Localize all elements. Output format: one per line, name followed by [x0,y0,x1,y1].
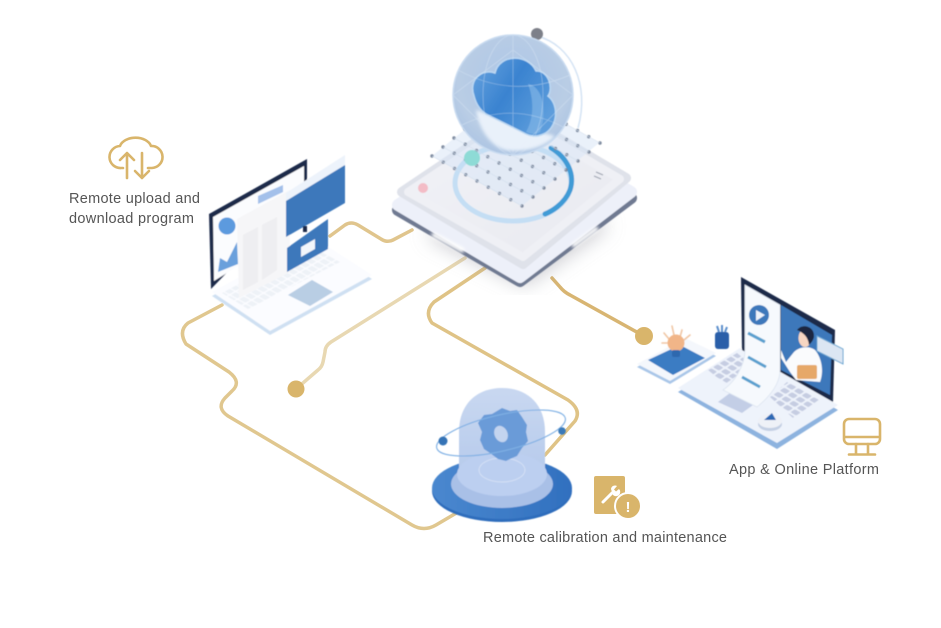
text: app platform label: App & Online Platform [729,462,879,478]
hub outer rim [402,114,626,264]
orbit arc [537,36,582,128]
globe lower highlight [476,110,555,151]
area chart [218,242,238,272]
laptop keyboard [222,246,340,309]
line: hub to open node [296,258,465,389]
glass dome [459,388,545,490]
line: laptop around to calibration dome [182,305,470,528]
calibration dome [432,388,572,522]
cloud shading [526,84,544,134]
trackpad [718,393,753,413]
laptop trackpad [288,280,333,306]
alert badge [615,493,641,519]
line: hub to calibration dome [428,268,577,455]
globe rim [453,35,573,155]
hub vents [594,172,603,179]
hub status light [418,183,428,193]
document columns [243,217,277,290]
person [781,326,822,382]
node dot: left [288,380,304,398]
dot grid [430,91,602,208]
hub ring [455,145,571,221]
text: remote upload label: Remote upload and [69,191,200,207]
teal marker [464,150,480,166]
laptop base [212,241,372,335]
hub side light right [574,229,596,245]
window panel header [286,155,345,201]
tablet edge [637,341,716,384]
hub device [398,91,631,285]
orbit ball right [558,427,566,435]
text: remote upload label: download program [69,211,194,227]
screen header bar [258,185,283,204]
text: calibration label: Remote calibration and maintenance [483,530,727,546]
globe with cloud [453,28,582,155]
line: laptop to hub [330,223,412,241]
hub top surface [408,119,620,257]
globe network [453,35,573,155]
laptop deck [678,348,838,443]
bulb base [672,350,680,357]
window panel [286,165,345,237]
laptop screen frame [209,159,307,289]
video thumbnail [301,239,315,257]
wrench card [594,476,625,514]
icon: cloud upload and download [109,138,163,178]
hub body [398,125,631,277]
node dot: right [635,327,653,345]
laptop screen inner [213,166,304,281]
hub side light left [434,235,462,250]
laptop: upload and download [209,155,372,335]
icon: monitor [844,419,880,454]
floating card [817,336,843,364]
app bars [742,333,766,387]
screen video area [781,305,832,395]
hub ring highlight [545,148,572,214]
app document panel [723,285,780,407]
screen frame [741,277,835,402]
text: remote upload label [69,191,200,227]
tablet body [637,338,716,381]
pen cup [715,325,729,349]
laptop deck [212,237,372,331]
wrench glyph [603,493,612,502]
line: hub to app platform [552,278,644,336]
hub base [398,130,631,281]
laptop base edge [678,354,838,449]
bulb rays [662,326,690,343]
orbit knob [531,28,543,40]
laptop: app and online platform [637,277,843,449]
connector lines [182,223,644,528]
pie chart [218,218,236,234]
orbit [433,401,569,465]
panel stem [303,226,307,232]
cloud [473,58,556,136]
icon: wrench alert [594,476,641,519]
orbit ball left [438,436,448,446]
light bulb [668,334,684,352]
dish edge [432,460,572,522]
play button [749,305,769,325]
globe sphere [453,35,573,155]
alert mark: ! [626,499,630,516]
tablet screen [648,345,705,375]
keyboard left keys [708,353,752,384]
keyboard right keys [770,382,820,418]
inner plate [451,460,553,508]
hub shadow [425,190,610,285]
platform [457,452,547,496]
video panel [287,219,328,272]
dish [432,457,572,519]
grid tint [432,93,599,206]
platform ring [479,458,525,482]
document panel [237,190,290,298]
button stack [758,413,782,431]
gear [478,408,528,461]
